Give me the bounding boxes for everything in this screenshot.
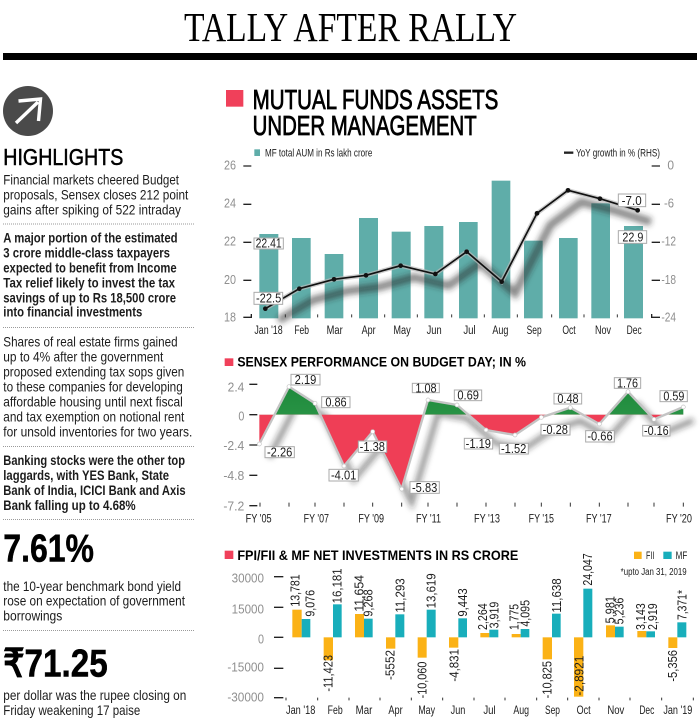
line shadow: [279, 202, 651, 320]
x axis labels: FY '17: [586, 513, 612, 526]
data labels: -1.38: [360, 439, 385, 454]
data labels: -1.52: [501, 441, 526, 456]
rotated value labels: 11,293: [393, 578, 407, 613]
x axis labels: FY '09: [358, 513, 384, 526]
legend: [634, 550, 688, 562]
text block: bond yield note: rose on expectation of government: [3, 593, 185, 609]
left axis: 20: [224, 272, 236, 287]
y axis: 0: [238, 409, 244, 424]
x axis labels: Jul: [463, 323, 476, 337]
legend: AUM bars: [254, 147, 372, 159]
data labels: -4.01: [331, 468, 356, 483]
rotated value labels: 5,236: [613, 598, 627, 624]
heading: net investments: FPI/FII & MF NET INVESTMENTS IN RS CRORE: [237, 547, 518, 563]
rotated value labels: 3,143: [634, 603, 648, 630]
text block: budget proposals: [3, 171, 188, 217]
rotated value labels: -5,356: [666, 650, 680, 682]
text block: real estate: to these companies for developing: [3, 379, 183, 395]
right axis: -12: [661, 234, 676, 249]
x axis labels: Apr: [388, 704, 403, 717]
left axis: 26: [224, 157, 236, 172]
x axis labels: FY '15: [529, 513, 554, 526]
right axis: -6: [664, 196, 674, 211]
rotated value labels: 24,047: [581, 553, 595, 586]
text block: income tax relief: A major portion of the estimated: [3, 229, 178, 245]
left axis: [224, 157, 251, 325]
y axis: 30000: [232, 570, 264, 585]
rotated value labels: 9,268: [362, 589, 376, 617]
text block: real estate: up to 4% after the government: [3, 349, 163, 365]
data labels: 1.08: [415, 380, 437, 395]
legend: MF: [676, 550, 688, 562]
text block: rupee note: [3, 687, 186, 718]
data labels: 22.9: [622, 230, 643, 245]
line chart: sensex: [257, 385, 685, 491]
data labels: 22.41: [256, 236, 282, 251]
y axis: [223, 380, 257, 514]
x axis labels: FY '11: [416, 513, 441, 526]
y axis: 2.4: [228, 380, 245, 395]
x axis labels: Mar: [327, 323, 343, 337]
text block: real estate: and tax exemption on notional rent: [3, 409, 184, 425]
rotated value labels: 11,654: [353, 575, 367, 612]
x axis labels: Nov: [595, 323, 611, 337]
x axis labels: Apr: [362, 323, 376, 337]
x axis labels: [254, 323, 642, 337]
x axis labels: Sep: [545, 704, 560, 717]
panel: FPI/FII and MF net investments: [225, 547, 693, 717]
x axis labels: Dec: [627, 323, 642, 337]
x axis labels: [286, 704, 692, 717]
heading: mutual funds assets: UNDER MANAGEMENT: [253, 110, 477, 141]
x axis labels: May: [418, 704, 435, 717]
right axis: -18: [661, 272, 676, 287]
rotated value labels: -10,060: [416, 662, 430, 698]
x axis labels: Jun: [427, 323, 442, 337]
data labels: -0.66: [587, 429, 613, 444]
text block: rupee note: Friday weakening 17 paise: [3, 702, 140, 718]
data labels: -0.28: [543, 422, 568, 437]
icon: red square: [226, 90, 243, 107]
rotated value labels: -4,831: [447, 649, 461, 682]
rotated value labels: 2,919: [646, 603, 660, 630]
text block: income tax relief: savings of up to Rs 18,500 crore: [3, 289, 176, 305]
x axis labels: Jul: [483, 704, 496, 717]
text block: budget proposals: gains after spiking of 522 intraday: [3, 201, 181, 217]
left axis: 18: [224, 310, 236, 325]
rotated value labels: 9,443: [456, 588, 470, 617]
text block: rupee note: per dollar was the rupee closing on: [3, 687, 186, 703]
x axis labels: Oct: [577, 704, 591, 717]
text block: banking stocks: laggards, with YES Bank, State: [3, 467, 169, 483]
x axis labels: Jun: [451, 704, 465, 717]
rotated value labels: 7,371*: [675, 590, 689, 620]
bar chart: AUM: [259, 181, 643, 318]
text block: banking stocks: Banking stocks were the other top: [3, 452, 185, 468]
area: negative returns: [259, 414, 684, 486]
y axis: [227, 570, 283, 705]
data labels: -22.5: [256, 291, 281, 306]
text block: bond yield note: the 10-year benchmark bond yield: [3, 578, 181, 594]
line shadow: [269, 400, 693, 502]
x axis labels: Nov: [607, 704, 624, 717]
rotated value labels: 2,264: [476, 603, 490, 630]
heading: highlights: HIGHLIGHTS: [3, 144, 123, 170]
bars: FII: [292, 610, 677, 697]
text block: income tax relief: Tax relief likely to invest the tax: [3, 274, 175, 290]
data labels: -1.19: [466, 436, 491, 451]
rotated value labels: 11,638: [550, 578, 564, 613]
heading: sensex: SENSEX PERFORMANCE ON BUDGET DAY; IN %: [237, 354, 526, 370]
rotated value labels: 4,095: [518, 600, 532, 627]
text block: banking stocks: Bank of India, ICICI Bank and Axis: [3, 482, 186, 498]
text block: real estate: [3, 334, 192, 440]
text block: real estate: proposed extending tax sops given: [3, 364, 184, 380]
data labels: [265, 372, 687, 495]
legend: AUM bars: MF total AUM in Rs lakh crore: [265, 147, 372, 159]
x axis labels: FY '07: [304, 513, 329, 526]
data labels: -5.83: [412, 480, 437, 495]
y axis: -2.4: [223, 438, 245, 453]
text block: real estate: affordable housing until next fiscal: [3, 394, 183, 410]
x axis labels: Jan '18: [254, 323, 283, 337]
text block: income tax relief: 3 crore middle-class taxpayers: [3, 244, 170, 260]
x axis labels: Jan '18: [286, 704, 315, 717]
rotated value labels: 13,781: [288, 574, 302, 607]
rotated value labels: 1,775: [507, 604, 521, 630]
rotated value labels: -11,423: [322, 655, 336, 692]
rotated value labels: 13,619: [425, 573, 439, 608]
rotated value labels: 16,181: [331, 568, 345, 603]
x axis labels: Mar: [356, 704, 372, 717]
data labels: [254, 193, 647, 306]
y axis: -15000: [227, 660, 264, 675]
x axis labels: Dec: [639, 704, 654, 717]
data labels: -2.26: [267, 445, 292, 460]
title: TALLY AFTER RALLY: [184, 4, 517, 50]
x axis labels: Jan '19: [663, 704, 692, 717]
x axis labels: FY '05: [246, 513, 272, 526]
legend: YoY growth: YoY growth in % (RHS): [576, 147, 660, 159]
x axis labels: Feb: [328, 704, 343, 717]
y axis: -4.8: [223, 468, 244, 483]
rotated value labels: -5552: [384, 650, 398, 680]
icon: up arrow in circle: [3, 86, 53, 136]
text block: real estate: for unsold inventories for two years.: [3, 424, 192, 440]
y axis: 15000: [232, 601, 264, 616]
rotated value labels: -2,8921: [572, 656, 586, 696]
heading: mutual funds assets: [253, 84, 498, 141]
x axis labels: Oct: [562, 323, 576, 337]
data labels: -0.16: [644, 423, 669, 438]
data labels: -7.0: [622, 193, 642, 208]
text block: bond yield note: borrowings: [3, 608, 62, 624]
rotated value labels: -10,825: [541, 661, 555, 698]
text block: income tax relief: into financial investments: [3, 304, 142, 320]
data labels: 0.48: [557, 391, 579, 406]
legend: FII: [646, 550, 654, 562]
y axis: 0: [258, 631, 264, 646]
data labels: 1.76: [617, 375, 638, 390]
x axis labels: Aug: [513, 704, 529, 717]
text block: real estate: Shares of real estate firms gained: [3, 334, 178, 350]
rotated value labels: [288, 553, 689, 698]
right axis: [652, 157, 676, 325]
x axis labels: Aug: [492, 323, 508, 337]
right axis: -24: [661, 310, 676, 325]
x axis labels: May: [393, 323, 411, 337]
x axis labels: Feb: [294, 323, 309, 337]
x axis labels: FY '13: [474, 513, 500, 526]
y axis: -30000: [227, 690, 264, 705]
panel: mutual funds AUM: [224, 84, 676, 337]
icon: red square: [225, 358, 233, 366]
line chart: YoY growth: [263, 188, 640, 311]
x axis labels: [246, 513, 692, 526]
data labels: 0.69: [457, 388, 479, 403]
data labels: 0.86: [325, 395, 347, 410]
text block: income tax relief: expected to benefit from Income: [3, 259, 177, 275]
heading: mutual funds assets: MUTUAL FUNDS ASSETS: [253, 84, 498, 115]
area: positive returns: [259, 388, 684, 415]
x axis labels: Sep: [527, 323, 542, 337]
text block: bond yield note: [3, 578, 185, 624]
rotated value labels: 9,076: [303, 590, 317, 617]
y axis: -7.2: [223, 499, 244, 514]
right axis: 0: [667, 157, 674, 172]
data labels: 0.59: [663, 389, 684, 404]
text block: banking stocks: Bank falling up to 4.68%: [3, 497, 136, 513]
text block: budget proposals: proposals, Sensex closes 212 point: [3, 186, 188, 202]
data labels: 2.19: [295, 372, 316, 387]
x axis labels: FY '20: [666, 513, 692, 526]
left axis: 22: [224, 234, 236, 249]
icon: red square: [225, 551, 233, 559]
rotated value labels: 3,919: [487, 602, 501, 628]
left axis: 24: [224, 196, 236, 211]
text block: banking stocks: [3, 452, 186, 513]
legend: YoY growth: [564, 147, 660, 159]
rotated value labels: 5,981: [603, 596, 617, 623]
text block: income tax relief: [3, 229, 178, 320]
text block: budget proposals: Financial markets cheered Budget: [3, 171, 179, 187]
panel: highlights sidebar: [3, 86, 194, 718]
bars: MF: [302, 589, 686, 637]
stat: rupee closing: ₹71.25: [3, 643, 108, 686]
stat: bond yield: 7.61%: [3, 528, 94, 571]
panel: sensex performance: [223, 354, 693, 526]
